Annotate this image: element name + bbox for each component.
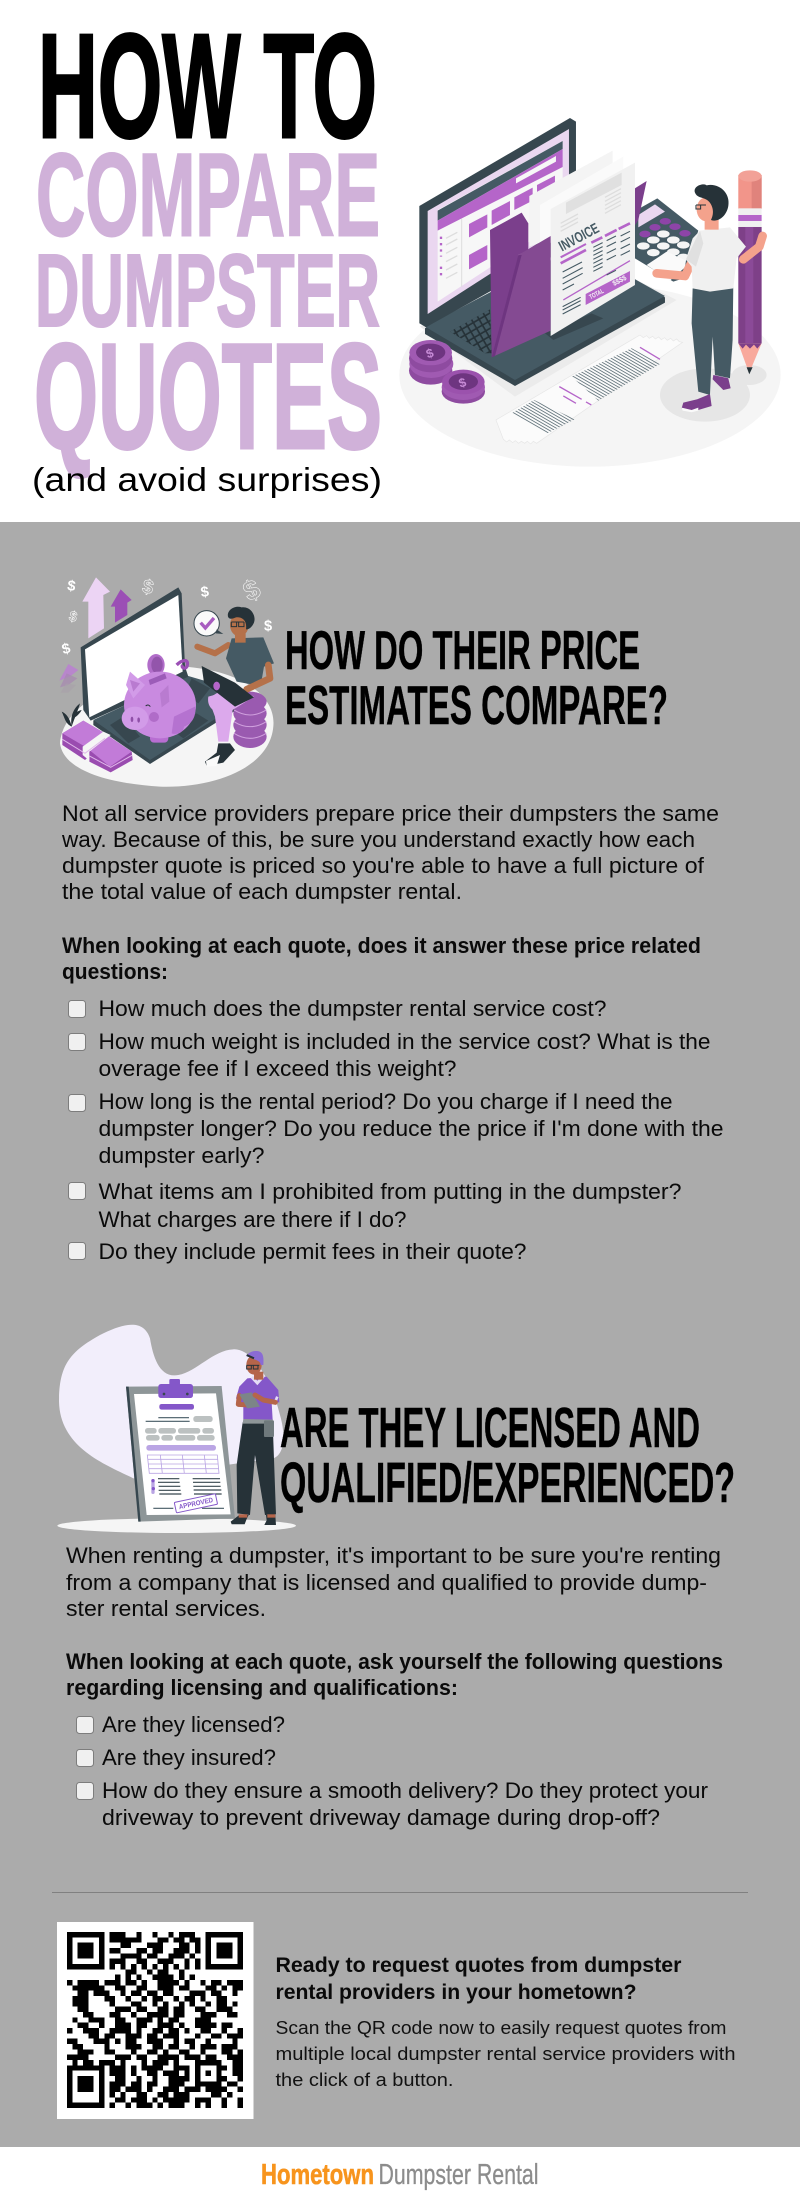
checklist item: smooth delivery: driveway to prevent driveway damage during drop-off? (102, 1805, 660, 1830)
illustration: piggy bank, laptop and man on coins: $ (140, 576, 155, 599)
checklist item 5: Do they include permit fees in their quote? (98, 1239, 526, 1264)
title line: COMPARE: COMPARE (36, 130, 380, 262)
receipt (496, 335, 683, 444)
checklist item 1: How much does the dumpster rental service cost? (98, 996, 606, 1021)
checklist item 3: How long is the rental period? Do you charge if I need the (98, 1089, 672, 1114)
approved stamp: APPROVED (178, 1497, 214, 1511)
title (32, 4, 382, 498)
illustration: piggy bank, laptop and man on coins: $ (66, 578, 76, 595)
illustration: piggy bank, laptop and man on coins: $ (60, 641, 72, 658)
checklist item 3 (68, 1089, 724, 1168)
text block: licensing question lead-in: regarding licensing and qualifications: (66, 1675, 458, 1700)
arrows (59, 577, 132, 693)
panel: section one, price estimates (59, 573, 724, 1264)
checklist item: insured: Are they insured? (102, 1745, 276, 1770)
text block: price intro: the total value of each dumpster rental. (62, 879, 462, 904)
call to action body (276, 2017, 736, 2090)
text block: price question lead-in: When looking at each quote, does it answer these price related (62, 933, 701, 958)
checklist item: smooth delivery: How do they ensure a smooth delivery? Do they protect your (102, 1778, 708, 1803)
clipboard (126, 1379, 235, 1522)
plant (62, 703, 82, 727)
checklist item 3: dumpster longer? Do you reduce the price if I'm done with the (98, 1116, 724, 1141)
checklist: licensing questions (76, 1712, 708, 1830)
QR code (57, 1922, 254, 2119)
footer logo: Hometown (261, 2159, 374, 2191)
text block: licensing intro: ster rental services. (66, 1596, 266, 1621)
invoice papers: $$$$ (611, 273, 628, 288)
checklist item 2: overage fee if I exceed this weight? (98, 1056, 456, 1081)
text block: licensing intro: from a company that is licensed and qualified to provide dump- (66, 1570, 707, 1595)
footer logo (261, 2159, 538, 2191)
footer logo: Dumpster Rental (378, 2159, 538, 2191)
title line: HOW TO: HOW TO (38, 4, 377, 169)
approved stamp (174, 1494, 218, 1513)
invoice papers (529, 151, 635, 336)
call to action body: the click of a button. (276, 2069, 454, 2090)
call to action heading: rental providers in your hometown? (276, 1981, 636, 2004)
checklist item 2 (68, 1029, 710, 1081)
text block: licensing question lead-in: When looking at each quote, ask yourself the following questions (66, 1649, 723, 1674)
checklist item: licensed: Are they licensed? (102, 1712, 285, 1737)
checklist item: smooth delivery (76, 1778, 708, 1830)
laptop base (425, 247, 665, 386)
call to action heading (276, 1954, 682, 2004)
checklist item 4: What charges are there if I do? (98, 1207, 406, 1232)
text block: licensing question lead-in (66, 1649, 723, 1700)
folder front (492, 236, 551, 357)
speech bubble with check (194, 611, 223, 636)
panel: call to action (57, 1922, 736, 2119)
panel: hero header (32, 4, 781, 498)
coin stacks: $ (424, 346, 435, 361)
text block: price intro (61, 801, 719, 904)
panel: gray content band (0, 522, 800, 2147)
illustration: piggy bank, laptop and man on coins (59, 573, 274, 787)
text block: price question lead-in (62, 933, 701, 984)
checklist item 2: How much weight is included in the service cost? What is the (98, 1029, 710, 1054)
call to action body: Scan the QR code now to easily request quotes from (276, 2017, 726, 2038)
illustration: piggy bank, laptop and man on coins: $ (264, 619, 272, 635)
laptop screen (419, 118, 576, 327)
piggy bank (122, 654, 196, 743)
pencil (738, 170, 762, 374)
worker (231, 1351, 279, 1525)
text block: licensing intro (66, 1543, 721, 1621)
illustration: piggy bank, laptop and man on coins: $ (238, 573, 265, 607)
text block: price intro: Not all service providers prepare price their dumpsters the same (62, 801, 719, 826)
heading: licensed and qualified (280, 1396, 735, 1515)
checklist item 3: dumpster early? (98, 1143, 264, 1168)
call to action body: multiple local dumpster rental service providers with (276, 2043, 736, 2064)
checklist item 4: What items am I prohibited from putting in the dumpster? (98, 1179, 682, 1204)
illustration: laptop, invoice, man with pencil (399, 118, 781, 467)
man on coin stack (197, 607, 274, 767)
text block: price question lead-in: questions: (62, 959, 168, 984)
folder back (635, 181, 647, 225)
text block: price intro: way. Because of this, be sure you understand exactly how each (61, 827, 695, 852)
call to action heading: Ready to request quotes from dumpster (276, 1954, 682, 1977)
illustration: approved clipboard and worker (57, 1325, 296, 1533)
invoice word: INVOICE (556, 221, 602, 255)
man (647, 184, 763, 412)
coin stacks: $ (457, 375, 468, 391)
coin stacks (409, 340, 485, 404)
heading: price estimates (285, 619, 668, 736)
text block: price intro: dumpster quote is priced so you're able to have a full picture of (62, 853, 705, 878)
panel: section two, licensing (57, 1325, 735, 1830)
invoice total: TOTAL (588, 288, 605, 301)
title line: DUMPSTER: DUMPSTER (35, 233, 380, 348)
checklist: price questions (68, 996, 724, 1264)
illustration: piggy bank, laptop and man on coins: $ (200, 584, 210, 601)
text block: licensing intro: When renting a dumpster, it's important to be sure you're renting (66, 1543, 721, 1568)
laptop (81, 587, 253, 764)
subtitle: (and avoid surprises) (32, 461, 382, 498)
calculator (635, 198, 698, 282)
checklist item 4 (68, 1179, 682, 1232)
money stacks (62, 721, 133, 772)
illustration: piggy bank, laptop and man on coins: $ (67, 607, 79, 625)
title line: QUOTES: QUOTES (34, 312, 382, 480)
